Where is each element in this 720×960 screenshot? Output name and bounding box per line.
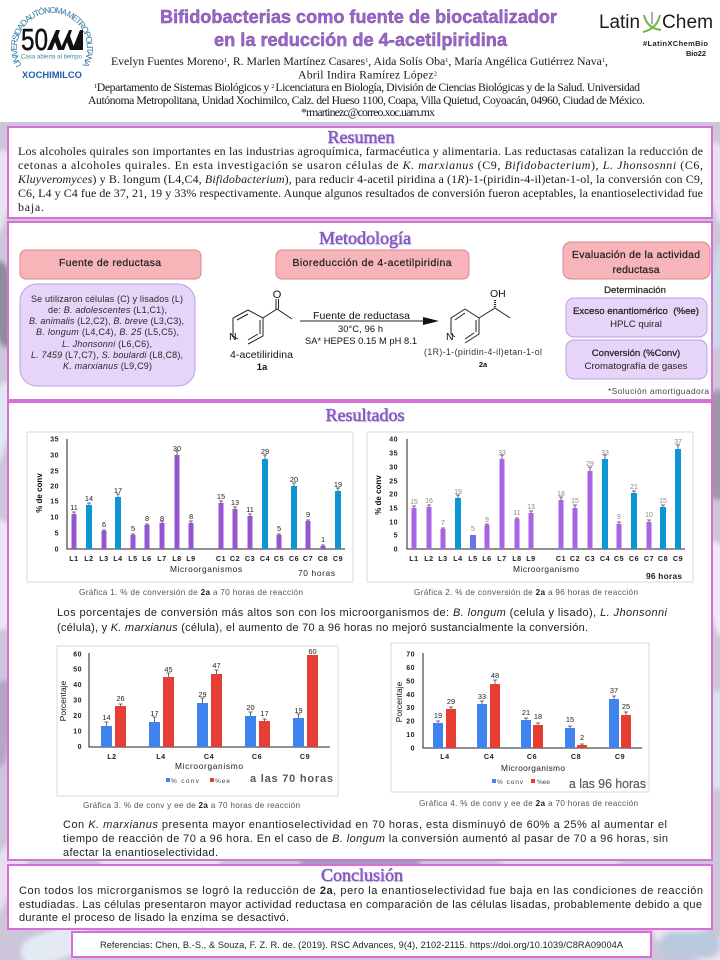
bar chart: grafica 3: 20 xyxy=(73,713,82,720)
bar chart: grafica 1: 5 xyxy=(55,530,59,538)
box: evaluacion xyxy=(563,242,710,279)
bar chart: grafica 1 xyxy=(27,432,353,582)
bar chart: grafica 4: 30 xyxy=(406,705,415,712)
chemical structure: 2a: 2a xyxy=(479,360,488,369)
box: exceso enantiomerico: HPLC quiral xyxy=(610,319,662,330)
box: evaluacion: reductasa xyxy=(612,265,660,276)
chemical structure: 1a: N xyxy=(229,331,237,343)
bar chart: grafica 1: 70 horas xyxy=(298,568,335,578)
text block: resumen: C6, L4 y C4 fue de 37, 21, 19 y 33% respectivamente. Aunque algunos resultados de conversión fueron aceptables, la enantioselectividad fue xyxy=(18,186,703,200)
box: microorganismos: K. marxianus (L9,C9) xyxy=(63,361,152,371)
text block: conclusion: durante el proceso de lisado la enzima se desactivó. xyxy=(19,912,289,924)
bar chart: grafica 1: 8 xyxy=(145,514,149,523)
heading: resumen: Resumen xyxy=(328,127,394,147)
bar chart: grafica 4: 2 xyxy=(580,733,584,742)
bar chart: grafica 3: a las 70 horas xyxy=(250,773,333,785)
bar chart: grafica 3: 60 xyxy=(308,647,317,656)
bar chart: grafica 2: 9 xyxy=(485,517,489,524)
bar chart: grafica 3: 50 xyxy=(73,666,82,674)
bar chart: grafica 2: 0 xyxy=(394,546,398,554)
bar chart: grafica 1: 29 xyxy=(261,447,269,456)
text block: conclusion xyxy=(19,885,703,924)
bar chart: grafica 3: 17 xyxy=(150,709,159,718)
bar chart: grafica 2: L2 xyxy=(424,554,434,563)
bar chart: grafica 2: 29 xyxy=(586,461,594,468)
text block: enantioselectivity comments: Con K. marxianus presenta mayor enantioselectividad en 70 horas, esta disminuyó de 60% a 25% al aumentar el xyxy=(63,819,667,831)
text block: enantioselectivity comments xyxy=(63,819,668,859)
logo: UAM Xochimilco: Casa abierta al tiempo xyxy=(21,54,82,60)
bar chart: grafica 1: L2 xyxy=(84,554,94,563)
panel: resumen xyxy=(8,127,712,218)
bar chart: grafica 2: C3 xyxy=(585,554,595,563)
bar chart: grafica 2: C6 xyxy=(629,554,639,563)
box: fuente de reductasa: Fuente de reductasa xyxy=(59,258,161,269)
bar chart: grafica 2: 13 xyxy=(527,504,535,511)
panel: referencias: Referencias: Chen, B.-S., & Souza, F. Z. R. de. (2019). RSC Advances, 9(4), 2102-2115. https://doi.org/10.1039/C8RA09004A xyxy=(100,940,624,950)
bar chart: grafica 4: 10 xyxy=(406,732,415,739)
bar chart: grafica 4: 29 xyxy=(447,697,455,706)
chemical structure: 1a xyxy=(229,289,293,373)
panel: referencias xyxy=(72,932,651,957)
bar chart: grafica 3: C9 xyxy=(300,752,310,761)
bar chart: grafica 3: Microorganismo xyxy=(175,761,243,771)
bar chart: grafica 4: Porcentaje xyxy=(394,681,404,722)
arrow: reaction conditions: 30°C, 96 h xyxy=(338,324,383,334)
bar chart: grafica 3: 14 xyxy=(102,713,111,722)
logo: UAM Xochimilco: 50 xyxy=(21,22,48,57)
chemical structure: 2a: OH xyxy=(490,288,506,300)
bar chart: grafica 4: 33 xyxy=(478,692,486,701)
bar chart: grafica 4: Microorganismo xyxy=(501,763,565,773)
bar chart: grafica 1: L7 xyxy=(157,554,167,563)
bar chart: grafica 2: L6 xyxy=(482,554,492,563)
bar chart: grafica 4: C9 xyxy=(615,752,625,761)
bar chart: grafica 1: 20 xyxy=(290,475,298,484)
bar chart: grafica 2: 9 xyxy=(617,514,621,521)
bar chart: grafica 1: C4 xyxy=(260,554,270,563)
logo: UAM Xochimilco: XOCHIMILCO xyxy=(22,70,82,81)
bar chart: grafica 3: 29 xyxy=(198,690,207,699)
bar chart: grafica 4: 20 xyxy=(406,718,415,726)
authors and affiliations: , María Angélica Gutiérrez Nava xyxy=(448,54,603,68)
bar chart: grafica 4: C4 xyxy=(484,752,494,761)
authors and affiliations: 1 xyxy=(224,57,227,64)
box: microorganismos xyxy=(20,284,195,386)
bar chart: grafica 2: % de conv xyxy=(374,475,383,515)
box: bioreduccion: Bioreducción de 4-acetilpiridina xyxy=(292,258,452,269)
bar chart: grafica 3: 0 xyxy=(78,744,82,751)
authors and affiliations: Licenciatura en Biología, División de Ciencias Biológicas y de la Salud. Universidad xyxy=(275,80,640,94)
bar chart: grafica 1: C1 xyxy=(216,554,226,563)
authors and affiliations: Evelyn Fuentes Moreno xyxy=(111,54,224,68)
bar chart: grafica 1: 10 xyxy=(50,514,59,522)
chemical structure: 2a: N xyxy=(446,331,454,343)
bar chart: grafica 2: 15 xyxy=(389,506,398,512)
logo: LatinXChem: #LatinXChemBio xyxy=(643,39,708,48)
bar chart: grafica 1: 11 xyxy=(246,505,254,514)
label: determinacion: Determinación xyxy=(604,285,666,296)
authors and affiliations: 1 xyxy=(94,83,97,90)
bar chart: grafica 1: 15 xyxy=(217,492,225,501)
bar chart: grafica 1: C8 xyxy=(318,554,328,563)
box: microorganismos: L. Jhonsonni (L6,C6), xyxy=(62,339,152,349)
bar chart: grafica 2: 21 xyxy=(630,484,638,491)
bar chart: grafica 1: 11 xyxy=(70,503,78,512)
bar chart: grafica 1: 20 xyxy=(50,484,59,490)
bar chart: grafica 3: 26 xyxy=(116,694,125,703)
authors and affiliations: Departamento de Sistemas Biológicos y xyxy=(97,80,272,94)
authors and affiliations: , xyxy=(605,54,608,68)
bar chart: grafica 3: 19 xyxy=(294,706,303,715)
chemical structure: 2a: (1R)-1-(piridin-4-il)etan-1-ol xyxy=(424,347,542,357)
bar chart: grafica 1: C6 xyxy=(289,554,299,563)
bar chart: grafica 2 xyxy=(367,432,693,582)
bar chart: grafica 2: 10 xyxy=(645,512,653,519)
box: fuente de reductasa xyxy=(20,250,201,279)
bar chart: grafica 2: C2 xyxy=(570,554,580,563)
panel: resultados xyxy=(8,402,712,860)
bar chart: grafica 1: 5 xyxy=(277,524,281,533)
box: bioreduccion xyxy=(276,250,469,279)
bar chart: grafica 3 xyxy=(57,646,338,796)
bar chart: grafica 2: 96 horas xyxy=(646,571,682,581)
bar chart: grafica 1: L1 xyxy=(69,554,79,563)
panel: metodologia xyxy=(8,222,712,400)
bar chart: grafica 2: 40 xyxy=(389,436,398,444)
bar chart: grafica 2: 15 xyxy=(571,498,579,505)
bar chart: grafica 4: L4 xyxy=(440,752,450,761)
bar chart: grafica 1: 14 xyxy=(85,494,93,503)
bar chart: grafica 4: 19 xyxy=(434,711,442,720)
bar chart: grafica 1: C7 xyxy=(303,554,313,563)
authors and affiliations: , Aida Solís Oba xyxy=(368,54,446,68)
bar chart: grafica 3: L2 xyxy=(107,752,117,761)
bar chart: grafica 1: 30 xyxy=(173,444,181,453)
bar chart: grafica 4: 15 xyxy=(566,715,574,724)
text block: resumen: baja. xyxy=(18,200,44,214)
authors and affiliations: 1 xyxy=(365,57,368,64)
caption: grafica 1: Gráfica 1. % de conversión de 2a a 70 horas de reacción xyxy=(79,588,303,597)
box: microorganismos: de: B. adolescentes (L1,C1), xyxy=(48,305,167,315)
authors and affiliations: *rmartinezc@correo.xoc.uam.mx xyxy=(301,105,435,119)
bar chart: grafica 1: 35 xyxy=(50,436,59,444)
bar chart: grafica 1: 30 xyxy=(50,452,59,460)
authors and affiliations xyxy=(88,54,645,119)
arrow: reaction conditions: SA* HEPES 0.15 M pH 8.1 xyxy=(305,336,417,346)
bar chart: grafica 3: 17 xyxy=(260,709,269,718)
caption: grafica 3: Gráfica 3. % de conv y ee de 2a a 70 horas de reacción xyxy=(83,801,300,810)
heading: conclusion: Conclusión xyxy=(321,865,403,885)
logo: LatinXChem: Chem xyxy=(662,12,713,33)
authors and affiliations: 2 xyxy=(434,70,437,78)
bar chart: grafica 4 xyxy=(391,643,649,792)
text block: enantioselectivity comments: tiempo de reacción de 70 a 96 hora. En el caso de B. longum la conversión aumentó al pasar de 70 a 96 horas, sin xyxy=(63,833,668,845)
bar chart: grafica 1: Microorganismos xyxy=(170,564,242,574)
logo: LatinXChem: Bio22 xyxy=(686,49,706,58)
bar chart: grafica 3: 40 xyxy=(73,682,82,689)
bar chart: grafica 3: % conv xyxy=(171,778,200,785)
bar chart: grafica 3: 60 xyxy=(73,652,82,658)
box: microorganismos: B. longum (L4,C4), B. 25 (L5,C5), xyxy=(36,327,179,337)
bar chart: grafica 1: L9 xyxy=(186,554,196,563)
bar chart: grafica 2: 5 xyxy=(471,526,475,533)
bar chart: grafica 1: 0 xyxy=(55,546,59,554)
chemical structure: 1a: 1a xyxy=(257,362,268,373)
heading: metodologia: Metodología xyxy=(319,228,411,248)
bar chart: grafica 4: % conv xyxy=(497,779,524,786)
caption: grafica 2: Gráfica 2. % de conversión de 2a a 96 horas de reacción xyxy=(414,588,638,597)
bar chart: grafica 4: 37 xyxy=(610,686,618,695)
bar chart: grafica 3: L4 xyxy=(156,752,166,761)
box: exceso enantiomerico xyxy=(566,298,707,337)
bar chart: grafica 4: 25 xyxy=(622,702,630,711)
bar chart: grafica 1: 1 xyxy=(321,535,325,544)
bar chart: grafica 2: C4 xyxy=(600,554,610,563)
chemical structure: 1a: 4-acetiliridina xyxy=(230,349,293,361)
bar chart: grafica 4: 60 xyxy=(406,665,415,672)
bar chart: grafica 1: C9 xyxy=(333,554,343,563)
bar chart: grafica 2: 37 xyxy=(674,439,682,446)
box: evaluacion: Evaluación de la actividad xyxy=(572,250,700,261)
bar chart: grafica 1: 15 xyxy=(50,498,59,506)
text block: enantioselectivity comments: afectar la enantioselectividad. xyxy=(63,847,218,859)
caption: grafica 4: Gráfica 4. % de conv y ee de 2a a 70 horas de reacción xyxy=(419,799,638,808)
bar chart: grafica 2: 33 xyxy=(498,450,506,457)
panel: conclusion xyxy=(8,865,712,929)
bar chart: grafica 2: 19 xyxy=(454,489,462,496)
bar chart: grafica 2: Microorganismo xyxy=(513,564,579,574)
bar chart: grafica 2: 10 xyxy=(389,520,398,526)
bar chart: grafica 3: Porcentaje xyxy=(58,680,68,721)
box: microorganismos: L. 7459 (L7,C7), S. boulardi (L8,C8), xyxy=(31,350,183,360)
box: conversion: Conversión (%Conv) xyxy=(592,348,680,359)
bar chart: grafica 2: 5 xyxy=(394,532,398,540)
bar chart: grafica 2: 7 xyxy=(441,520,445,527)
bar chart: grafica 2: 18 xyxy=(557,491,565,498)
text block: conversion comments xyxy=(57,607,668,634)
bar chart: grafica 3: 20 xyxy=(246,703,255,712)
bar chart: grafica 4: 0 xyxy=(411,746,415,752)
authors and affiliations: Autónoma Metropolitana, Unidad Xochimilco, Calz. del Hueso 1100, Coapa, Villa Quietud, Coyoacán, 04960, Ciudad de México. xyxy=(88,93,645,107)
text block: resumen: Los alcoholes quirales son importantes en las industrias agroquímica, farmacéutica y alimentaria. Las reductasas catalizan la reducción de xyxy=(18,144,703,158)
text block: resumen xyxy=(17,144,703,214)
bar chart: grafica 2: C9 xyxy=(673,554,683,563)
bar chart: grafica 1: % de conv xyxy=(35,473,44,513)
bar chart: grafica 3: 30 xyxy=(73,698,82,704)
arrow: reaction conditions: Fuente de reductasa xyxy=(313,310,410,322)
bar chart: grafica 2: 15 xyxy=(410,499,418,506)
bar chart: grafica 2: C7 xyxy=(644,554,654,563)
bar chart: grafica 1: L8 xyxy=(172,554,182,563)
box: microorganismos: B. animalis (L2,C2), B. breve (L3,C3), xyxy=(29,316,184,326)
box: conversion xyxy=(566,340,707,379)
bar chart: grafica 1: 8 xyxy=(189,512,193,521)
bar chart: grafica 2: C8 xyxy=(658,554,668,563)
bar chart: grafica 2: L4 xyxy=(453,554,463,563)
chemical structure: 2a xyxy=(424,288,542,369)
authors and affiliations: 1 xyxy=(602,57,605,64)
text block: conversion comments: (célula), y K. marxianus (célula), el aumento de 70 a 96 horas no mejoró sustancialmente la conversión. xyxy=(57,622,588,634)
bar chart: grafica 4: 48 xyxy=(491,671,499,680)
title: en la reducción de 4-acetilpiridina xyxy=(214,29,508,50)
bar chart: grafica 2: C5 xyxy=(614,554,624,563)
bar chart: grafica 2: L8 xyxy=(512,554,522,563)
bar chart: grafica 4: %ee xyxy=(537,779,550,786)
bar chart: grafica 1: 5 xyxy=(131,524,135,533)
authors and affiliations: 2 xyxy=(271,83,276,90)
bar chart: grafica 3: 10 xyxy=(73,728,82,736)
bar chart: grafica 2: L7 xyxy=(497,554,507,563)
bar chart: grafica 4: 70 xyxy=(406,652,415,658)
bar chart: grafica 1: 17 xyxy=(114,486,122,495)
bar chart: grafica 3: 47 xyxy=(212,661,221,670)
bar chart: grafica 2: 30 xyxy=(389,464,398,472)
bar chart: grafica 2: 33 xyxy=(601,450,609,457)
bar chart: grafica 1: C3 xyxy=(245,554,255,563)
bar chart: grafica 4: a las 96 horas xyxy=(569,776,646,791)
logo: LatinXChem xyxy=(599,12,713,58)
title: Bifidobacterias como fuente de biocatalizador xyxy=(160,6,557,27)
bar chart: grafica 4: 18 xyxy=(534,712,542,721)
arrow: reaction conditions xyxy=(300,310,439,346)
text block: resumen: Kluyveromyces) y B. longum (L4,C4, Bifidobacterium), para reducir 4-acetil piridina a (1R)-1-(piridin-4-il)etan-1-ol, la conversión con C9, xyxy=(17,172,703,186)
bar chart: grafica 1: C2 xyxy=(230,554,240,563)
title xyxy=(160,6,557,50)
text block: conclusion: estudiadas. Las células presentaron mayor actividad reductasa en comparación de las células lisadas, probablemente debido a que xyxy=(19,899,702,911)
chemical structure: 1a: O xyxy=(273,289,282,301)
bar chart: grafica 1: L5 xyxy=(128,554,138,563)
bar chart: grafica 4: C8 xyxy=(571,752,581,761)
bar chart: grafica 2: L9 xyxy=(526,554,536,563)
box: microorganismos: Se utilizaron células (C) y lisados (L) xyxy=(31,294,183,304)
bar chart: grafica 3: 45 xyxy=(164,665,173,674)
bar chart: grafica 2: 16 xyxy=(425,498,433,505)
bar chart: grafica 1: L3 xyxy=(99,554,109,563)
bar chart: grafica 1: 25 xyxy=(50,468,59,476)
bar chart: grafica 1: C5 xyxy=(274,554,284,563)
bar chart: grafica 4: 21 xyxy=(522,708,530,717)
text block: conclusion: Con todos los microrganismos se logró la reducción de 2a, pero la enantioselectividad fue baja en las condiciones de reacción xyxy=(19,885,703,897)
bar chart: grafica 2: 11 xyxy=(513,510,521,517)
bar chart: grafica 3: C4 xyxy=(204,752,214,761)
bar chart: grafica 2: L5 xyxy=(468,554,478,563)
logo: LatinXChem: Latin xyxy=(599,12,640,33)
bar chart: grafica 1: 19 xyxy=(334,480,342,489)
authors and affiliations: Abril Indira Ramírez López xyxy=(298,68,434,82)
bar chart: grafica 1: 13 xyxy=(231,498,239,507)
bar chart: grafica 4: 40 xyxy=(406,692,415,699)
bar chart: grafica 1: 6 xyxy=(102,520,106,529)
authors and affiliations: 1 xyxy=(445,57,448,64)
note: solucion amortiguadora: *Solución amortiguadora xyxy=(608,386,709,396)
bar chart: grafica 2: 15 xyxy=(659,498,667,505)
bar chart: grafica 2: C1 xyxy=(556,554,566,563)
bar chart: grafica 1: 9 xyxy=(306,510,310,519)
text block: resumen: cetonas a alcoholes quirales. En esta investigación se usaron células de K. marxianus (C9, Bifidobacterium), L. Jhonsosnni (C6, xyxy=(18,158,703,172)
bar chart: grafica 3: C6 xyxy=(252,752,262,761)
authors and affiliations: , R. Marlen Martínez Casares xyxy=(227,54,366,68)
bar chart: grafica 2: L1 xyxy=(409,554,419,563)
heading: resultados: Resultados xyxy=(326,405,404,425)
bar chart: grafica 2: 20 xyxy=(389,492,398,498)
bar chart: grafica 2: 35 xyxy=(389,450,398,458)
bar chart: grafica 2: L3 xyxy=(438,554,448,563)
text block: conversion comments: Los porcentajes de conversión más altos son con los microorganismos de: B. longum (celula y lisado), L. Jhonsonni xyxy=(57,607,668,619)
box: exceso enantiomerico: Exceso enantiomérico (%ee) xyxy=(573,306,699,317)
box: conversion: Cromatografía de gases xyxy=(585,361,688,372)
bar chart: grafica 4: 50 xyxy=(406,678,415,686)
bar chart: grafica 2: 25 xyxy=(389,478,398,486)
bar chart: grafica 4: C6 xyxy=(527,752,537,761)
bar chart: grafica 1: L6 xyxy=(142,554,152,563)
bar chart: grafica 3: %ee xyxy=(215,778,230,785)
logo: UAM Xochimilco: UNIVERSIDAD AUTÓNOMA METROPOLITANA xyxy=(11,6,93,68)
bar chart: grafica 1: 8 xyxy=(160,514,164,523)
bar chart: grafica 1: L4 xyxy=(113,554,123,563)
